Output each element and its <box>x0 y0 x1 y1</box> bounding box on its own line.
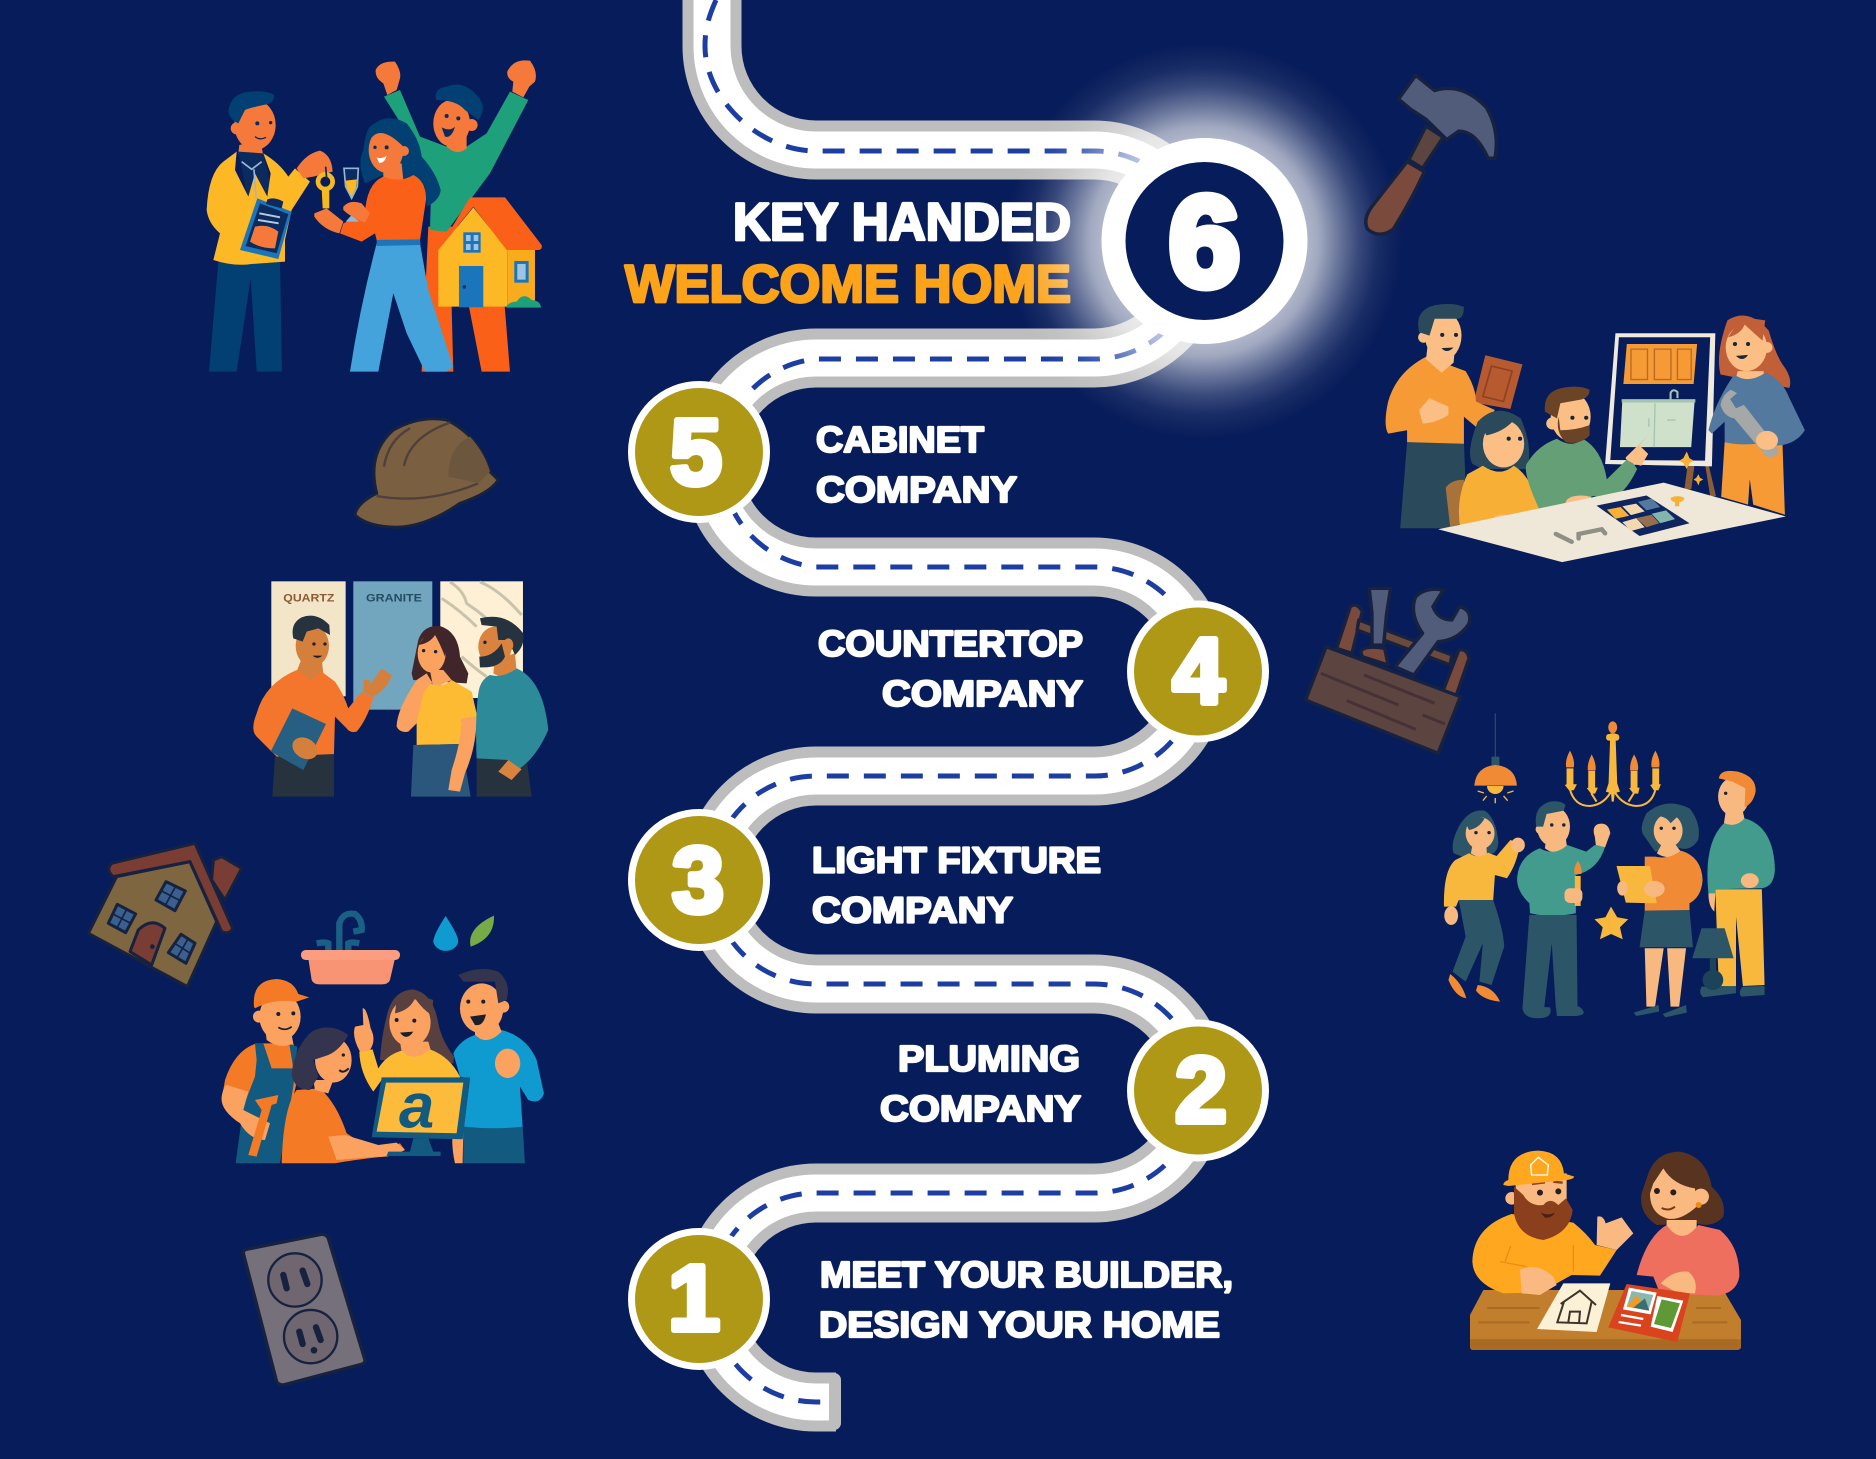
step 6 badge: 6 <box>1169 171 1240 314</box>
step 1 badge <box>632 1232 766 1366</box>
illustration: light fixtures <box>1444 713 1775 1018</box>
illustration: meet your builder <box>1470 1151 1741 1350</box>
step 4 label: COMPANY <box>882 673 1083 714</box>
plumber <box>222 979 309 1163</box>
agent with clipboard <box>207 91 333 372</box>
star <box>1594 907 1628 939</box>
sample panels: QUARTZ <box>283 592 334 604</box>
man cheering <box>376 60 536 372</box>
step 3 badge: 3 <box>672 828 724 932</box>
easel with cabinet drawing <box>1605 333 1716 496</box>
step 3 label <box>812 840 1101 930</box>
woman with wrench <box>1708 315 1805 515</box>
step 2 label <box>880 1038 1081 1129</box>
step 5 label <box>816 419 1017 510</box>
man in orange shirt <box>253 616 392 797</box>
step 5 badge <box>632 384 766 520</box>
heading: key handed, welcome home <box>625 193 1071 314</box>
step 1 label: DESIGN YOUR HOME <box>819 1304 1220 1345</box>
man with candle <box>1517 801 1610 1018</box>
icon: tilted house <box>88 843 242 987</box>
leaf <box>470 916 494 947</box>
winding road <box>705 0 1198 1430</box>
step 1 badge: 1 <box>668 1246 720 1350</box>
heading: key handed, welcome home: KEY HANDED <box>733 193 1071 252</box>
client woman <box>1637 1152 1739 1296</box>
computer monitor: a <box>399 1072 434 1142</box>
key <box>318 167 333 208</box>
step 1 label <box>819 1254 1233 1345</box>
pendant lamp <box>1474 713 1517 803</box>
icon: electrical outlet <box>243 1234 365 1385</box>
step 6 badge <box>1114 150 1296 332</box>
step 5 badge: 5 <box>670 400 722 504</box>
illustration: countertop selection <box>253 581 548 797</box>
step 4 badge <box>1130 604 1266 739</box>
step 4 badge: 4 <box>1173 619 1225 723</box>
illustration: key handover <box>207 60 542 372</box>
step 4 label: COUNTERTOP <box>818 623 1083 664</box>
water drop <box>433 916 458 951</box>
sample panels <box>271 581 523 710</box>
sink <box>301 914 400 984</box>
house plan paper <box>1537 1283 1610 1332</box>
seated woman <box>1446 411 1540 533</box>
illustration: cabinet planning <box>1386 304 1805 562</box>
man holding cabinet door <box>1386 304 1522 528</box>
photo brochure <box>1608 1284 1690 1342</box>
icon: hammer <box>1366 75 1496 234</box>
table with swatches <box>1438 483 1786 562</box>
step 5 label: CABINET <box>816 419 984 460</box>
bearded man <box>476 617 548 797</box>
step 2 label: COMPANY <box>880 1088 1081 1129</box>
step 2 label: PLUMING <box>898 1038 1080 1079</box>
woman with tablet <box>1616 804 1703 1017</box>
step 2 badge: 2 <box>1175 1038 1227 1142</box>
builder <box>1472 1151 1633 1295</box>
step 3 badge <box>632 812 766 948</box>
woman in yellow <box>1444 810 1525 1002</box>
computer monitor <box>372 1072 470 1156</box>
bearded man pointing <box>1526 387 1648 510</box>
table lamp and man in teal <box>1692 771 1775 997</box>
glow behind step 6 <box>1006 43 1402 439</box>
step 5 label: COMPANY <box>816 469 1017 510</box>
heading: key handed, welcome home: WELCOME HOME <box>625 255 1071 314</box>
step 1 label: MEET YOUR BUILDER, <box>820 1254 1233 1295</box>
step 3 label: COMPANY <box>812 890 1013 930</box>
sample panels: GRANITE <box>366 592 422 604</box>
icon: hard hat <box>355 419 498 527</box>
man in blue <box>452 969 544 1163</box>
little house <box>438 197 542 308</box>
step 4 label <box>818 623 1083 714</box>
step 3 label: LIGHT FIXTURE <box>812 840 1101 880</box>
woman pointing <box>354 989 460 1092</box>
woman thinking <box>397 626 477 797</box>
table <box>1470 1290 1741 1350</box>
chandelier <box>1565 721 1661 806</box>
illustration: plumbing <box>222 914 544 1163</box>
seated woman <box>282 1027 405 1163</box>
woman with glass <box>314 118 453 372</box>
icon: toolbox <box>1305 588 1470 753</box>
step 2 badge <box>1130 1023 1266 1158</box>
